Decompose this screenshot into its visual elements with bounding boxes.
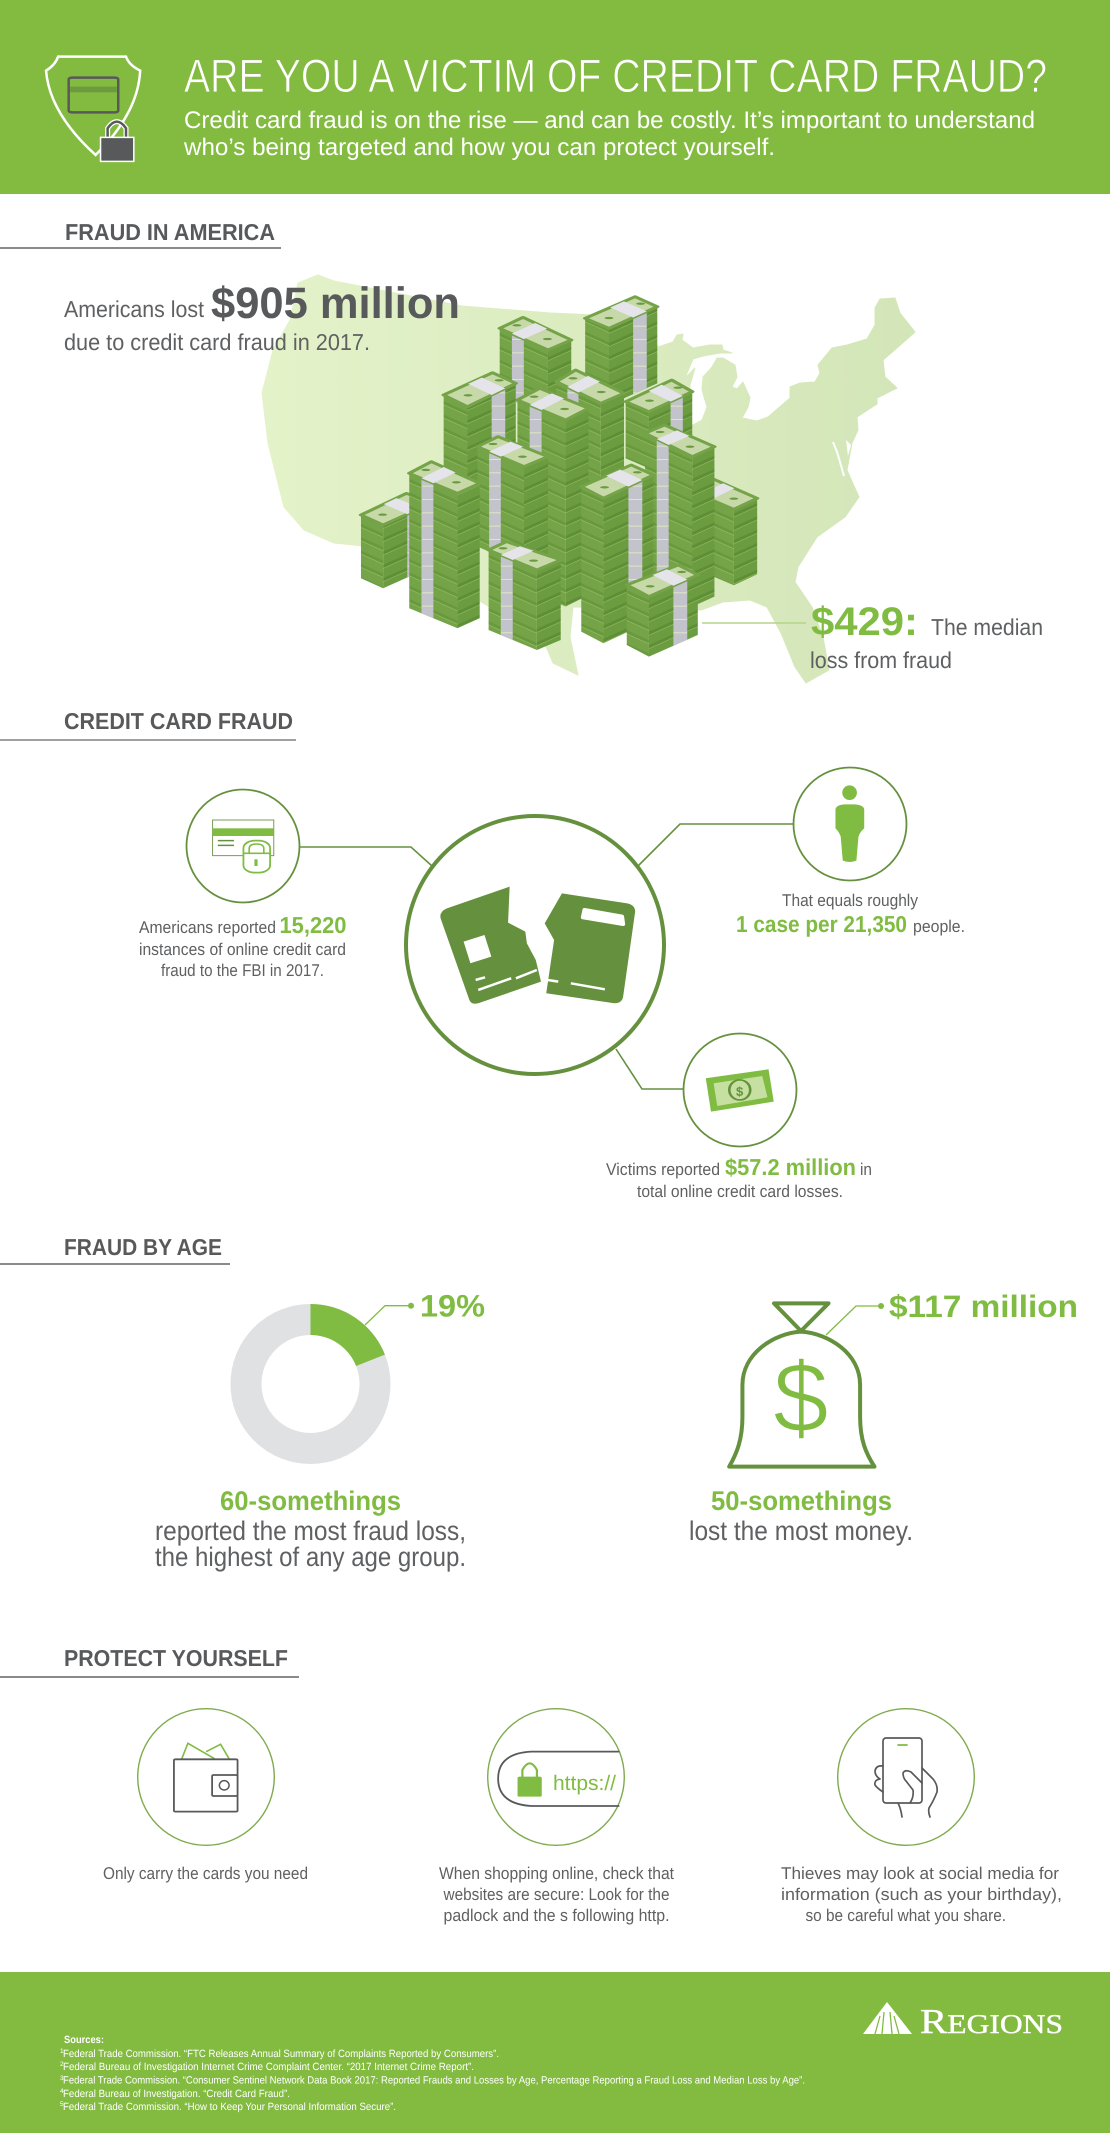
text: $57.2 million losses: Victims reported xyxy=(606,1160,720,1179)
text: $57.2 million losses: in xyxy=(860,1160,872,1179)
sources list: Federal Bureau of Investigation Internet Crime Complaint Center. “2017 Internet Crime Report”. xyxy=(63,2061,474,2073)
left circle: card and lock icon xyxy=(186,790,300,902)
text: social media advice: Thieves may look at social media for xyxy=(781,1864,1059,1883)
text: 15,220 instances: 15,220 xyxy=(280,912,346,938)
bottom circle: banknote icon xyxy=(684,1034,796,1146)
icon: money bag with $117 million: $ xyxy=(773,1342,829,1454)
callout: $429 median loss: $429: xyxy=(811,600,918,644)
icon: money bag with $117 million: $117 million xyxy=(889,1289,1078,1324)
stat: $905 million lost xyxy=(64,279,460,355)
text: only carry the cards you need: Only carry the cards you need xyxy=(103,1864,308,1883)
text: 15,220 instances: fraud to the FBI in 2017. xyxy=(161,961,324,980)
text: 1 case per 21,350 people: people. xyxy=(913,917,965,936)
connector lines xyxy=(299,824,793,1089)
text: 50-somethings xyxy=(689,1486,913,1546)
callout: $429 median loss xyxy=(702,600,1043,673)
subtitle xyxy=(183,107,1035,161)
central circle: broken credit card xyxy=(406,816,664,1074)
donut chart: 19%: 19% xyxy=(420,1288,485,1324)
sources list: 2 xyxy=(60,2061,64,2068)
callout: $429 median loss: The median xyxy=(931,614,1043,640)
footer banner xyxy=(0,1972,1110,2133)
text: $57.2 million losses: total online credit card losses. xyxy=(637,1182,843,1201)
text: social media advice: so be careful what you share. xyxy=(806,1906,1006,1925)
text: 1 case per 21,350 people: 1 case per 21,350 xyxy=(736,911,907,937)
sources list xyxy=(60,2034,805,2113)
logo: Regions: REGIONS xyxy=(920,2002,1063,2041)
icon: wallet in circle xyxy=(138,1709,274,1845)
icon: https padlock in circle: https:// xyxy=(553,1772,616,1795)
sources list: Federal Trade Commission. “FTC Releases Annual Summary of Complaints Reported by Consumers”. xyxy=(63,2048,499,2060)
text: social media advice xyxy=(781,1864,1062,1925)
text: 50-somethings: 50-somethings xyxy=(711,1486,892,1516)
subtitle: Credit card fraud is on the rise — and can be costly. It’s important to understand xyxy=(184,107,1035,134)
sources list: 1 xyxy=(60,2048,64,2055)
map of the United States xyxy=(262,275,915,683)
subtitle: who’s being targeted and how you can protect yourself. xyxy=(183,134,775,161)
section heading: protect yourself: PROTECT YOURSELF xyxy=(64,1645,288,1671)
stat: $905 million lost: Americans lost xyxy=(64,296,205,322)
text: shopping online advice xyxy=(439,1864,674,1925)
logo: Regions xyxy=(863,2002,1063,2041)
text: 1 case per 21,350 people xyxy=(736,891,965,937)
icon: shield with card and padlock xyxy=(46,57,140,161)
text: social media advice: information (such as your birthday), xyxy=(781,1885,1062,1904)
sources list: Sources: xyxy=(64,2034,104,2046)
text: $57.2 million losses xyxy=(606,1154,872,1201)
callout: $429 median loss: loss from fraud xyxy=(810,647,952,673)
section heading: fraud in america: FRAUD IN AMERICA xyxy=(65,219,275,245)
text: 1 case per 21,350 people: That equals roughly xyxy=(782,891,918,910)
text: 60-somethings xyxy=(155,1486,466,1572)
donut chart: 19% xyxy=(246,1288,485,1448)
text: 15,220 instances: Americans reported xyxy=(139,918,276,937)
text: 15,220 instances xyxy=(139,912,346,980)
text: shopping online advice: When shopping online, check that xyxy=(439,1864,674,1883)
sources list: 4 xyxy=(60,2088,64,2095)
section heading: credit card fraud: CREDIT CARD FRAUD xyxy=(64,708,293,734)
sources list: 5 xyxy=(60,2101,64,2108)
icon: https padlock in circle xyxy=(488,1709,624,1845)
money stacks xyxy=(361,297,757,657)
sources list: Federal Trade Commission. “How to Keep Your Personal Information Secure”. xyxy=(63,2101,396,2113)
stat: $905 million lost: due to credit card fraud in 2017. xyxy=(64,329,370,355)
text: 50-somethings: lost the most money. xyxy=(689,1516,913,1546)
icon: hand holding phone in circle xyxy=(838,1709,974,1845)
stat: $905 million lost: $905 million xyxy=(211,279,460,328)
sources list: Federal Trade Commission. “Consumer Sentinel Network Data Book 2017: Reported Frauds and Losses by Age, Percentage Reporting a Fraud Loss and Median Loss by Age”. xyxy=(63,2074,805,2086)
header banner xyxy=(0,0,1110,194)
text: $57.2 million losses: $57.2 million xyxy=(725,1154,856,1180)
bottom circle: banknote icon: $ xyxy=(736,1084,744,1099)
sources list: Federal Bureau of Investigation. “Credit Card Fraud”. xyxy=(63,2088,290,2100)
icon: money bag with $117 million xyxy=(729,1289,1078,1467)
text: 60-somethings: the highest of any age group. xyxy=(155,1542,466,1572)
text: shopping online advice: padlock and the s following http. xyxy=(444,1906,670,1925)
section heading: fraud by age: FRAUD BY AGE xyxy=(64,1234,222,1260)
text: 15,220 instances: instances of online credit card xyxy=(139,940,346,959)
sources list: 3 xyxy=(60,2075,64,2082)
right circle: person icon xyxy=(794,768,906,880)
text: shopping online advice: websites are secure: Look for the xyxy=(443,1885,670,1904)
text: 60-somethings: reported the most fraud loss, xyxy=(155,1516,466,1546)
text: 60-somethings: 60-somethings xyxy=(220,1486,401,1516)
